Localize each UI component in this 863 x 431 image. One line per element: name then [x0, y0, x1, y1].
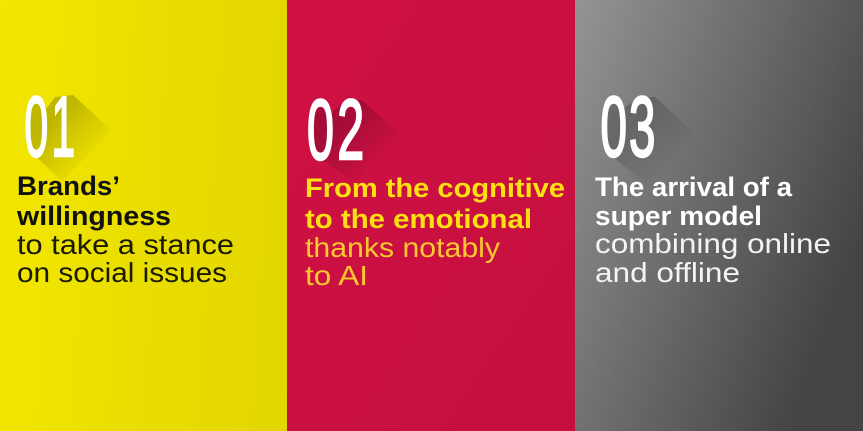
text: combining online and offline: combining online	[595, 228, 831, 259]
text: combining online and offline	[595, 228, 831, 288]
text: to take a stance on social issues: on social issues	[17, 257, 227, 288]
heading: From the cognitive to the emotional: From the cognitive	[305, 173, 565, 203]
heading: From the cognitive to the emotional	[305, 173, 565, 234]
text: to take a stance on social issues	[17, 229, 234, 288]
heading: Brands' willingness: Brands’	[17, 171, 120, 201]
panel: red 02	[287, 0, 575, 431]
heading: The arrival of a super model: super model	[595, 201, 762, 231]
text: thanks notably to AI	[305, 232, 500, 291]
text: to take a stance on social issues: to take a stance	[17, 229, 234, 260]
text: combining online and offline: and offline	[595, 257, 740, 288]
number shadow 02	[312, 100, 402, 183]
number 01: 01	[24, 80, 75, 175]
number shadow 03	[605, 97, 696, 183]
number shadow 01	[29, 95, 112, 181]
heading: From the cognitive to the emotional: to the emotional	[305, 204, 532, 234]
heading: Brands' willingness	[16, 171, 171, 231]
number 02: 02	[307, 82, 364, 177]
number 03: 03	[600, 79, 656, 175]
text: thanks notably to AI: thanks notably	[305, 232, 500, 263]
panel: yellow 01	[0, 0, 287, 431]
heading: Brands' willingness: willingness	[16, 201, 171, 231]
heading: The arrival of a super model	[595, 172, 793, 231]
text: thanks notably to AI: to AI	[305, 260, 368, 291]
panel: grey 03	[575, 0, 863, 431]
heading: The arrival of a super model: The arrival of a	[595, 172, 793, 202]
